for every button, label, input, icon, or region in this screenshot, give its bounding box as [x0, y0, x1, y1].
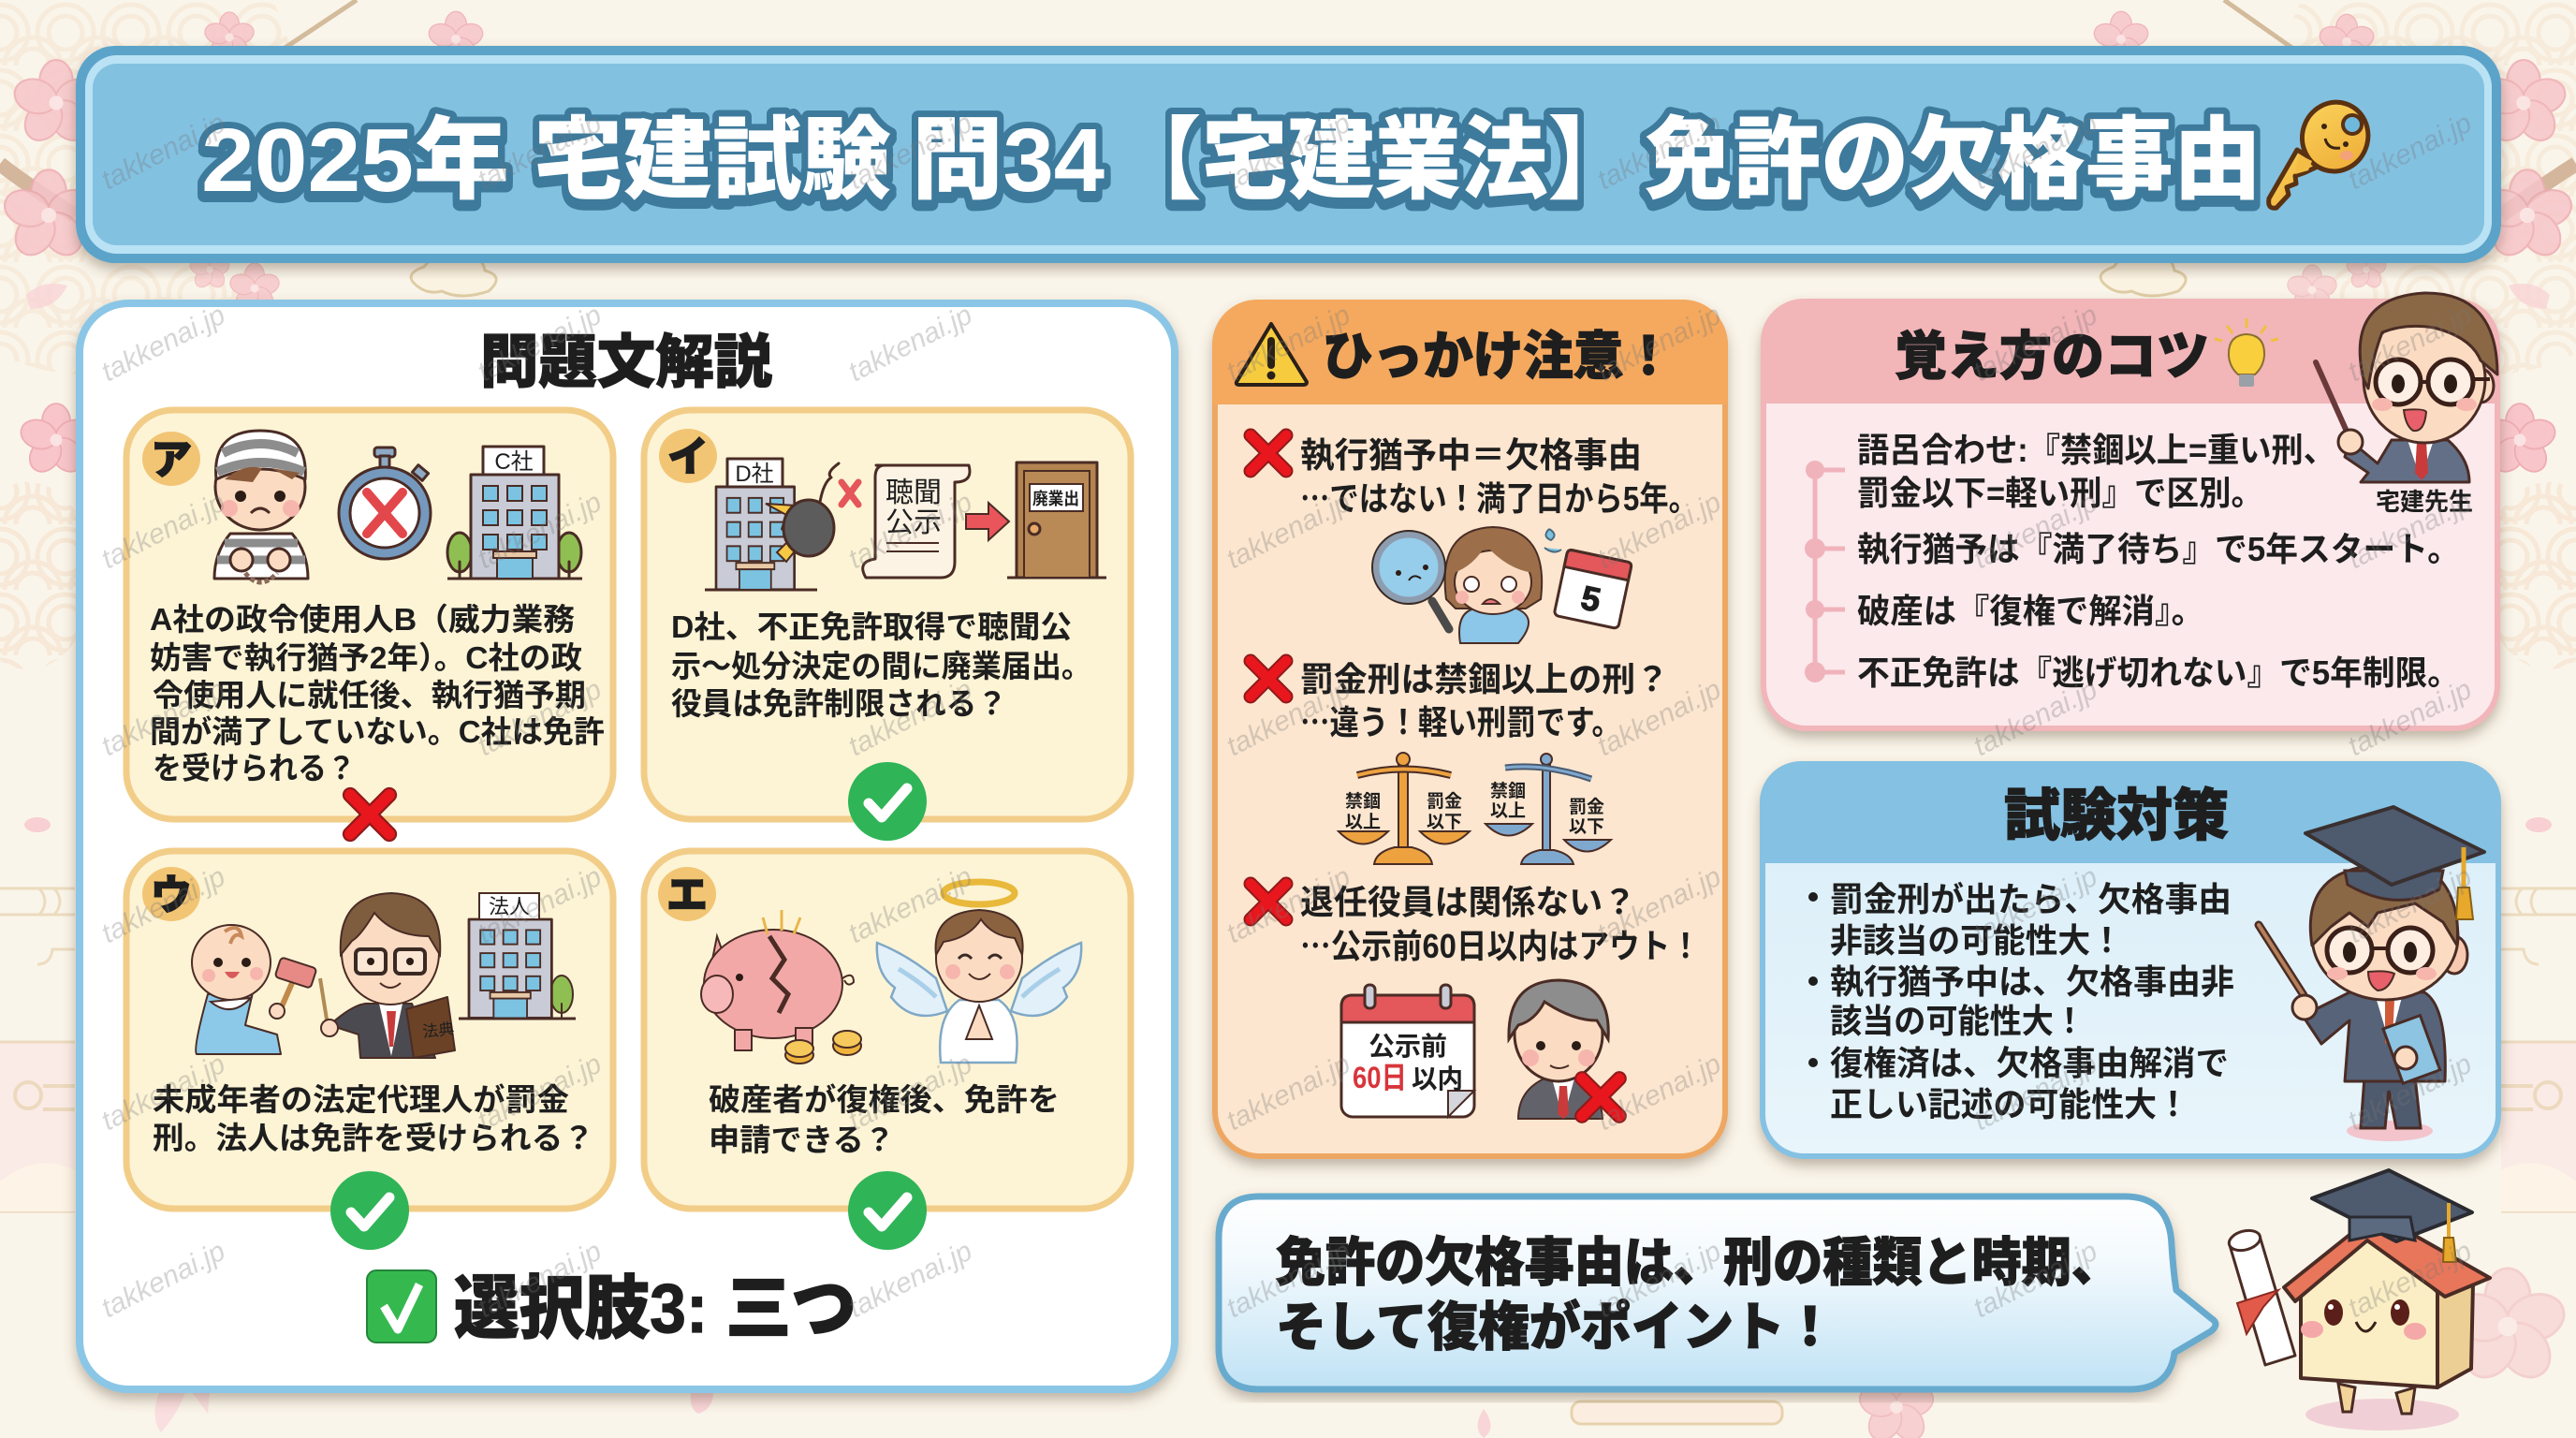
- text: ア: A社の政令使用人B（威力業務: [150, 602, 575, 637]
- watermarks: takkenai.jp: [1969, 108, 2102, 196]
- panel: trap warnings: [1212, 300, 1728, 1156]
- watermarks: takkenai.jp: [2343, 674, 2477, 762]
- text: ア: 間が満了していない。C社は免許: [150, 714, 605, 749]
- tips text: [1857, 431, 2460, 692]
- tips text: 語呂合わせ:『禁錮以上=重い刑、: [1857, 431, 2335, 469]
- card: エ: [644, 851, 1131, 1250]
- label: teacher name: 宅建先生: [2376, 488, 2473, 516]
- trap 3: 退任役員は関係ない？: [1300, 883, 1636, 921]
- watermarks: takkenai.jp: [843, 300, 977, 388]
- callout text: 免許の欠格事由は、刑の種類と時期、: [1276, 1233, 2121, 1292]
- icon: D社 building hit by bomb: [705, 459, 858, 590]
- icon: hearing notice scroll: 公示: [886, 507, 942, 538]
- watermarks: takkenai.jp: [1222, 861, 1355, 949]
- title text: [201, 110, 2261, 211]
- watermarks: takkenai.jp: [2343, 861, 2477, 949]
- text: エ: 破産者が復権後、免許を: [709, 1082, 1060, 1117]
- watermarks: takkenai.jp: [96, 108, 230, 196]
- arrow: [966, 503, 1009, 540]
- icon: green check box: [367, 1270, 436, 1343]
- text: ウ: 未成年者の法定代理人が罰金: [153, 1082, 569, 1117]
- icon: angel: [877, 882, 1081, 1063]
- strategy bullets: 執行猶予中は、欠格事由非: [1830, 962, 2234, 1001]
- watermarks: takkenai.jp: [1592, 487, 1726, 575]
- icon: door with closure sign: 廃業出: [1032, 490, 1079, 508]
- badge イ: [659, 429, 717, 483]
- watermarks: takkenai.jp: [1592, 861, 1726, 949]
- watermarks: takkenai.jp: [473, 487, 607, 575]
- icon: broken piggy bank: [701, 910, 861, 1064]
- text: イ: [671, 609, 1091, 721]
- icon: hearing notice scroll: 聴聞: [886, 477, 942, 508]
- watermarks: takkenai.jp: [1969, 1049, 2102, 1137]
- card: イ: [644, 410, 1131, 841]
- answer: 選択肢3: 三つ: [454, 1269, 856, 1347]
- watermarks: takkenai.jp: [473, 300, 607, 388]
- title text: 問34: [912, 110, 1105, 211]
- watermarks: takkenai.jp: [96, 674, 230, 762]
- watermarks: takkenai.jp: [473, 1236, 607, 1324]
- watermarks: takkenai.jp: [1592, 108, 1726, 196]
- icon: retired officer with cross: [1509, 980, 1619, 1119]
- watermarks: takkenai.jp: [1592, 300, 1726, 388]
- text: イ: D社、不正免許取得で聴聞公: [671, 609, 1072, 644]
- trap 1: 執行猶予中＝欠格事由: [1300, 436, 1642, 475]
- title text: 免許の欠格事由: [1645, 110, 2261, 211]
- icon: D社 building hit by bomb: D社: [735, 462, 774, 487]
- text: イ: 役員は免許制限される？: [671, 686, 1007, 721]
- icon: graduate teacher: [2259, 807, 2484, 1141]
- callout: speech bubble: [1219, 1196, 2216, 1389]
- callout text: そして復権がポイント！: [1276, 1298, 1836, 1357]
- text: イ: 示～処分決定の間に廃業届出。: [671, 649, 1091, 683]
- panel: exam strategy: [1760, 761, 2501, 1156]
- badge エ: エ: [666, 873, 708, 918]
- badge ア: ア: [151, 437, 192, 483]
- trap 1: [1251, 435, 1698, 521]
- trap 1: …ではない！満了日から5年。: [1300, 472, 1698, 521]
- strategy bullets: 該当の可能性大！: [1830, 1002, 2086, 1040]
- icon: balance scales: 以上: [1345, 812, 1381, 832]
- title banner: [76, 46, 2501, 263]
- title text: 宅建試験: [534, 110, 891, 211]
- watermarks: takkenai.jp: [2343, 300, 2477, 388]
- icon: 法人 building: [459, 893, 576, 1019]
- icon: baby with gavel: [192, 925, 316, 1054]
- icon: 法人 building: 法人: [489, 895, 530, 918]
- tips text: 執行猶予は『満了待ち』で5年スタート。: [1857, 530, 2460, 568]
- icon: house mascot: [2227, 1170, 2490, 1431]
- verdict: correct: [848, 762, 927, 841]
- icon: balance scales: 以上: [1490, 800, 1526, 821]
- watermarks: takkenai.jp: [1592, 1236, 1726, 1324]
- icon: balance scales: 罰金: [1569, 797, 1604, 817]
- title text: 2025年: [201, 110, 509, 211]
- icon: balance scales: 禁錮: [1345, 791, 1381, 812]
- icon: light bulb: [2215, 318, 2278, 387]
- trap 3: …公示前60日以内はアウト！: [1300, 919, 1701, 968]
- watermarks: takkenai.jp: [843, 487, 977, 575]
- icon: hearing notice scroll: [863, 465, 970, 578]
- strategy bullets: [1808, 880, 2234, 1123]
- watermarks: takkenai.jp: [1222, 487, 1355, 575]
- strategy bullets: 正しい記述の可能性大！: [1830, 1085, 2189, 1123]
- watermarks: takkenai.jp: [2343, 1049, 2477, 1137]
- icon: stopwatch with cross: [339, 448, 431, 559]
- text: ア: を受けられる？: [153, 751, 356, 785]
- icon: worried girl with magnifier and calendar: 5: [1578, 578, 1604, 620]
- watermarks: takkenai.jp: [1222, 674, 1355, 762]
- card: ア: [126, 410, 613, 834]
- icon: prisoner: [214, 431, 308, 582]
- scroll: [2227, 1227, 2295, 1365]
- icon: C社 building: C社: [494, 449, 534, 475]
- icon: balance scales: [1339, 753, 1611, 864]
- watermarks: takkenai.jp: [473, 108, 607, 196]
- watermarks: takkenai.jp: [2343, 1236, 2477, 1324]
- verdict: correct: [848, 1171, 927, 1250]
- watermarks: takkenai.jp: [1969, 300, 2102, 388]
- strategy bullets: 非該当の可能性大！: [1830, 921, 2123, 960]
- icon: smiling key: [2269, 94, 2377, 208]
- verdict: correct: [330, 1171, 409, 1250]
- watermarks: takkenai.jp: [843, 1236, 977, 1324]
- tips text: 罰金以下=軽い刑』で区別。: [1857, 474, 2263, 512]
- icon: warning triangle: [1237, 324, 1307, 385]
- tips timeline: [1815, 470, 1845, 672]
- watermarks: takkenai.jp: [1969, 861, 2102, 949]
- icon: calendar 60 days: 以内: [1412, 1064, 1463, 1093]
- callout text: [1276, 1233, 2121, 1357]
- tips text: 破産は『復権で解消』。: [1857, 592, 2204, 630]
- trap 2: 罰金刑は禁錮以上の刑？: [1300, 660, 1669, 698]
- text: ウ: 刑。法人は免許を受けられる？: [153, 1121, 594, 1155]
- watermarks: takkenai.jp: [473, 861, 607, 949]
- timeline dots: [1805, 461, 1825, 682]
- heading: trap warnings: ひっかけ注意！: [1323, 327, 1674, 386]
- icon: balance scales: 以下: [1569, 817, 1604, 837]
- icon: calendar 60 days: 公示前: [1368, 1032, 1447, 1061]
- watermarks: takkenai.jp: [1592, 674, 1726, 762]
- icon: C社 building: [447, 447, 582, 579]
- trap 3: [1251, 883, 1701, 968]
- strategy bullets: 復権済は、欠格事由解消で: [1830, 1044, 2229, 1082]
- badge ウ: [142, 867, 200, 921]
- watermarks: takkenai.jp: [2343, 108, 2477, 196]
- card: ウ: [126, 851, 613, 1250]
- icon: teacher: [2316, 293, 2497, 516]
- panel: memory tips: [1761, 293, 2499, 728]
- strategy bullets: 罰金刑が出たら、欠格事由: [1830, 880, 2232, 918]
- panel: question explanation: [80, 303, 1175, 1389]
- icon: balance scales: 以下: [1427, 813, 1462, 832]
- icon: balance scales: 禁錮: [1490, 781, 1526, 801]
- text: ア: 令使用人に就任後、執行猶予期: [153, 678, 586, 712]
- badge ア: [142, 432, 200, 486]
- watermarks: takkenai.jp: [96, 1049, 230, 1137]
- watermarks: takkenai.jp: [473, 674, 607, 762]
- watermarks: takkenai.jp: [96, 487, 230, 575]
- watermarks: takkenai.jp: [843, 674, 977, 762]
- tips text: 不正免許は『逃げ切れない』で5年制限。: [1857, 653, 2460, 692]
- watermarks: takkenai.jp: [1222, 300, 1355, 388]
- watermarks: takkenai.jp: [1969, 1236, 2102, 1324]
- watermarks: takkenai.jp: [843, 108, 977, 196]
- watermarks: takkenai.jp: [1222, 108, 1355, 196]
- watermarks: [96, 108, 2477, 1324]
- watermarks: takkenai.jp: [2343, 487, 2477, 575]
- text: ア: [150, 602, 605, 785]
- icon: legal representative: [320, 893, 455, 1058]
- heading: question explanation: 問題文解説: [480, 330, 772, 395]
- text: エ: 申請できる？: [709, 1123, 895, 1157]
- icon: worried girl with magnifier and calendar: [1372, 527, 1632, 643]
- text: ウ: [153, 1082, 594, 1155]
- icon: door with closure sign: [1007, 462, 1106, 578]
- watermarks: takkenai.jp: [96, 300, 230, 388]
- heading: exam strategy: 試験対策: [2004, 785, 2229, 847]
- watermarks: takkenai.jp: [96, 861, 230, 949]
- watermarks: takkenai.jp: [1969, 674, 2102, 762]
- trap 2: …違う！軽い刑罰です。: [1300, 696, 1621, 744]
- text: エ: [709, 1082, 1060, 1157]
- icon: calendar 60 days: [1341, 985, 1474, 1117]
- badge ウ: ウ: [151, 873, 192, 918]
- watermarks: takkenai.jp: [1222, 1049, 1355, 1137]
- icon: calendar 60 days: 60日: [1353, 1061, 1407, 1094]
- badge イ: イ: [667, 434, 709, 480]
- trap 2: [1251, 660, 1669, 744]
- watermarks: takkenai.jp: [96, 1236, 230, 1324]
- icon: balance scales: 罰金: [1427, 791, 1462, 812]
- text: ア: 妨害で執行猶予2年）。C社の政: [150, 640, 582, 675]
- icon: legal representative: 法典: [421, 1020, 455, 1041]
- title text: 【宅建業法】: [1115, 110, 1634, 211]
- watermarks: takkenai.jp: [1592, 1049, 1726, 1137]
- badge エ: [658, 867, 716, 921]
- watermarks: takkenai.jp: [843, 861, 977, 949]
- watermarks: takkenai.jp: [1222, 1236, 1355, 1324]
- watermarks: takkenai.jp: [473, 1049, 607, 1137]
- watermarks: takkenai.jp: [843, 1049, 977, 1137]
- verdict: wrong: [350, 795, 389, 834]
- watermarks: takkenai.jp: [1969, 487, 2102, 575]
- heading: memory tips: 覚え方のコツ: [1895, 327, 2209, 386]
